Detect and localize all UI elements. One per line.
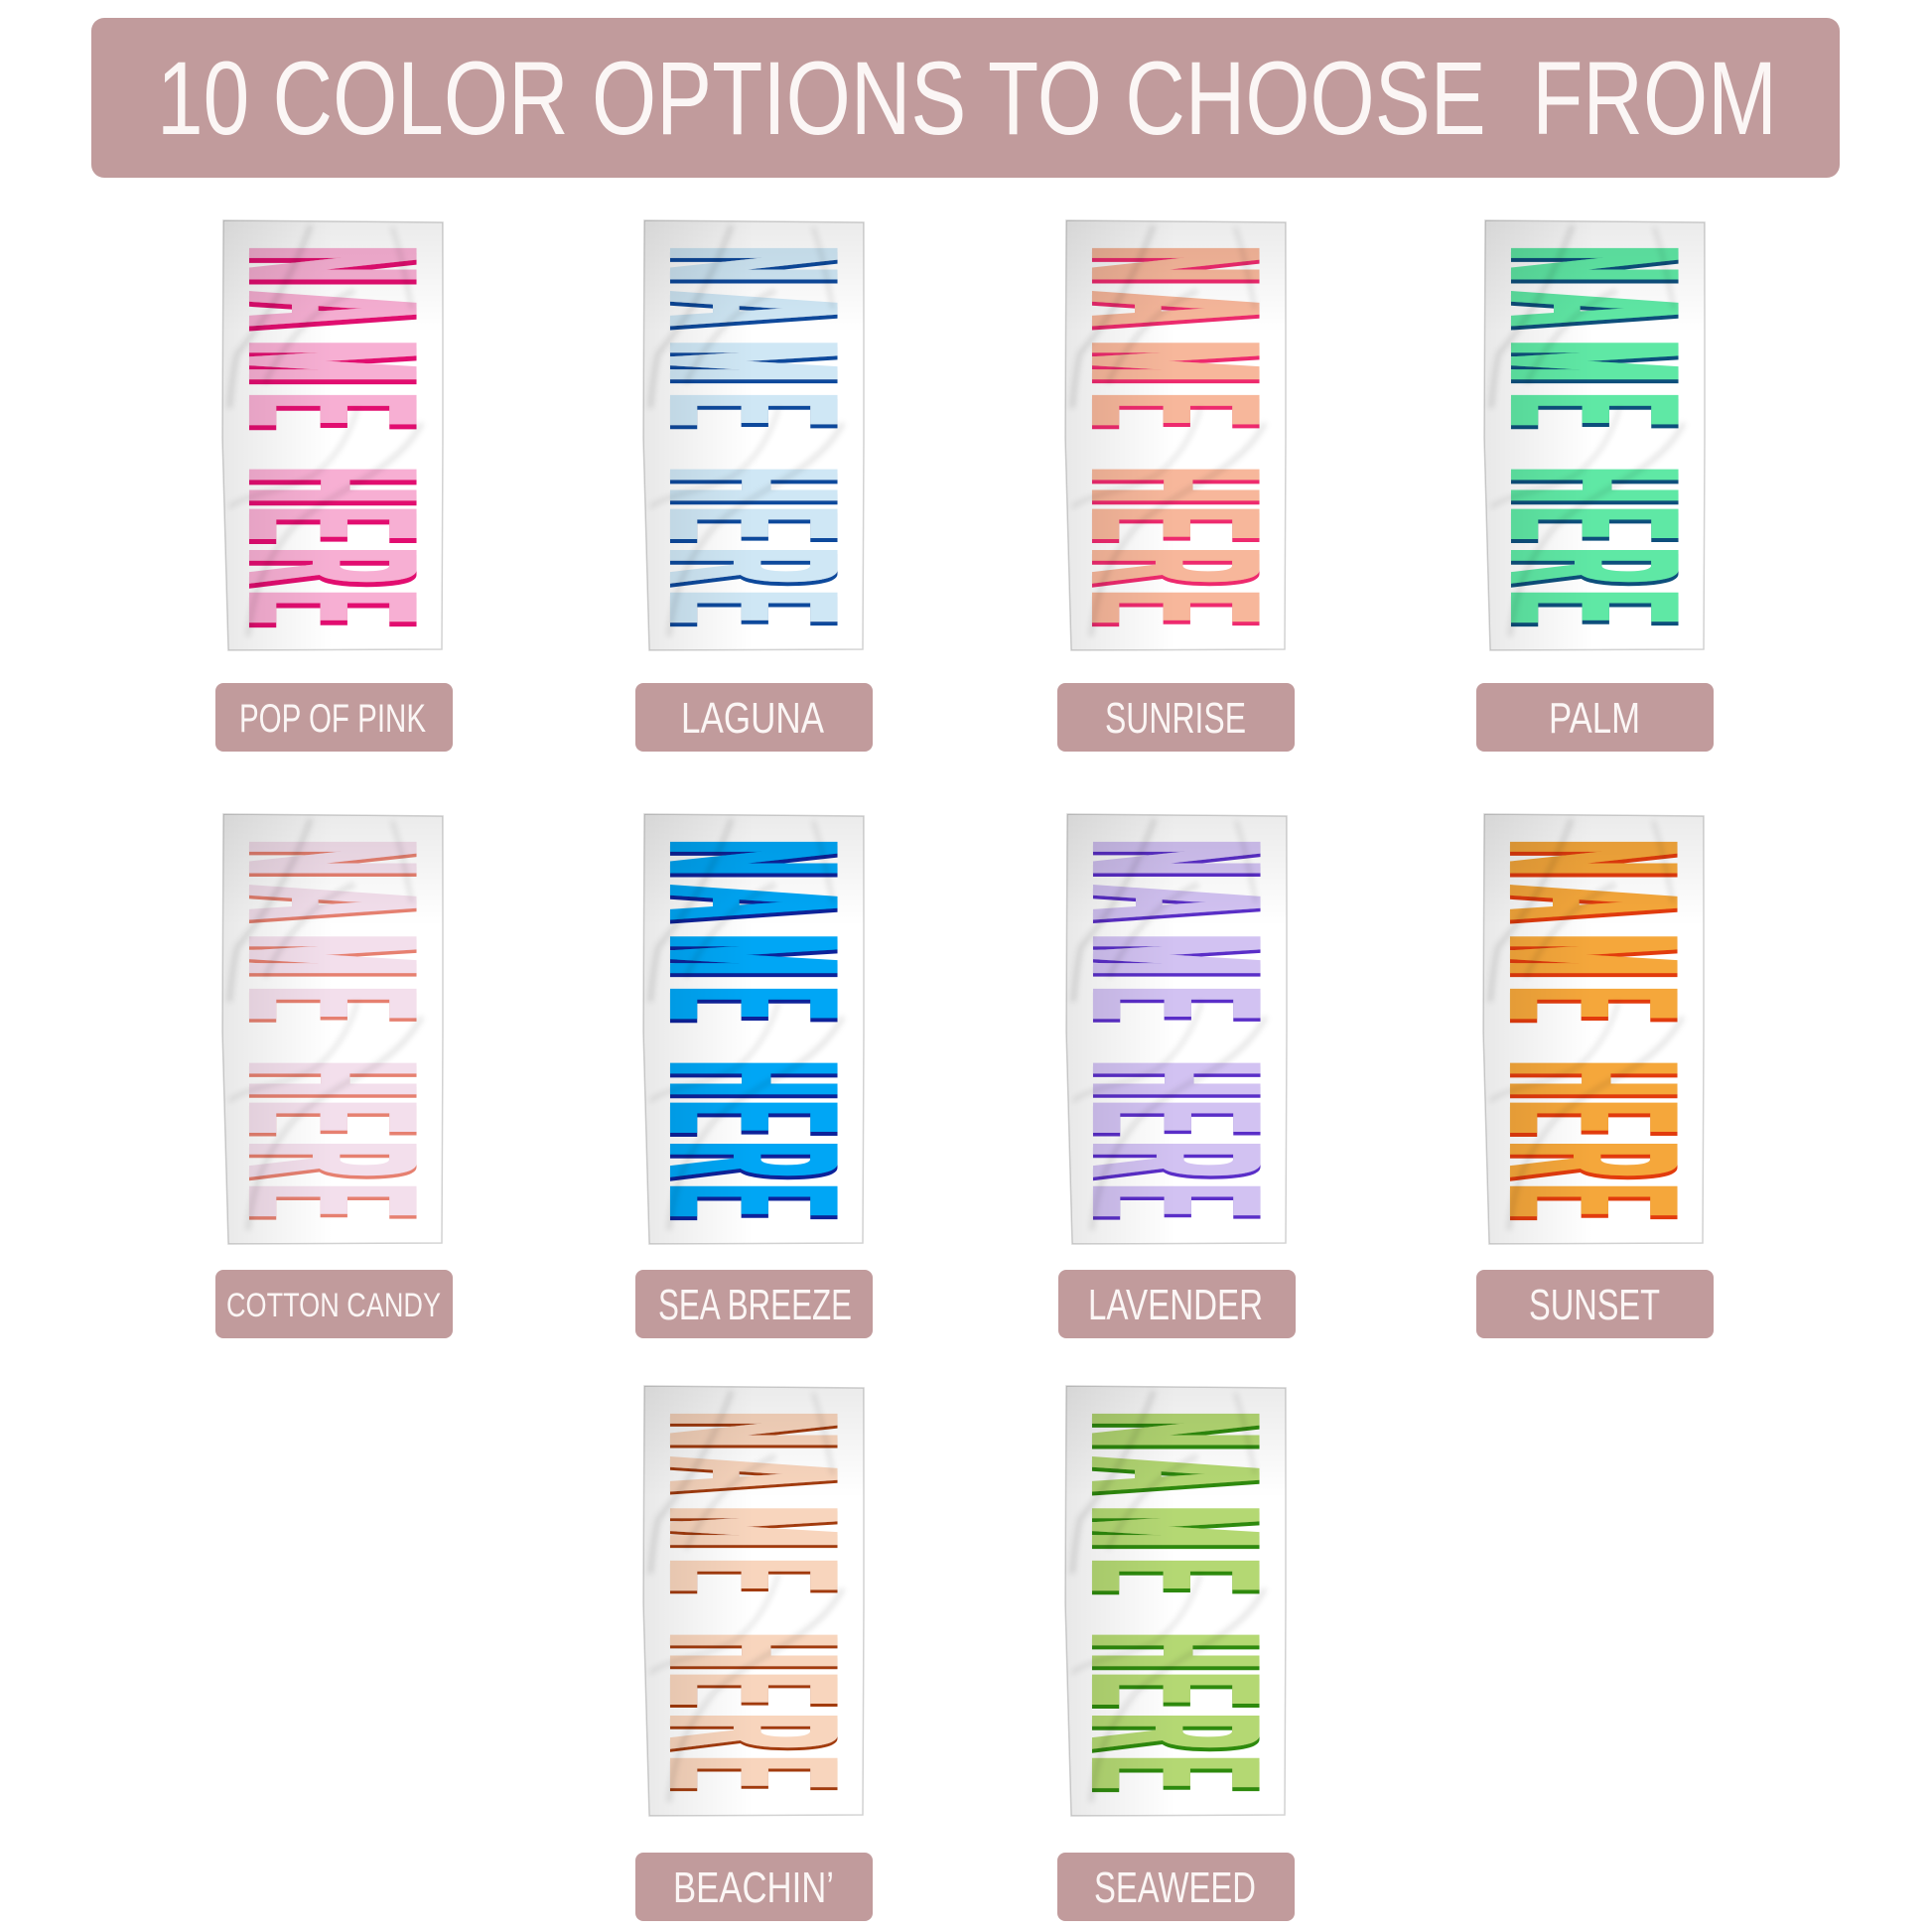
towel name text: NAME xyxy=(1458,247,1730,425)
towel name text: HERE xyxy=(618,469,890,622)
towel name text: NAME xyxy=(1457,841,1729,1019)
label: sunset: SUNSET xyxy=(1529,1281,1660,1329)
label: lavender: LAVENDER xyxy=(1088,1281,1263,1329)
towel name text xyxy=(1458,247,1730,622)
option: sunset xyxy=(1457,814,1729,1338)
label: cotton candy xyxy=(215,1270,453,1338)
label: sea breeze: SEA BREEZE xyxy=(658,1281,852,1329)
option: cotton candy xyxy=(197,814,469,1338)
option: palm xyxy=(1458,220,1730,752)
label: seaweed xyxy=(1057,1853,1295,1921)
towel name text: HERE xyxy=(1039,1634,1311,1788)
towel: lavender xyxy=(1040,814,1312,1244)
label: beachin: BEACHIN’ xyxy=(673,1863,834,1912)
towel name text: HERE xyxy=(1458,469,1730,622)
towel name text: NAME xyxy=(618,247,890,425)
label: sunset xyxy=(1476,1270,1714,1338)
towel: beachin xyxy=(618,1386,890,1816)
label: lavender xyxy=(1058,1270,1296,1338)
towel name text xyxy=(618,247,890,622)
label: sunrise xyxy=(1057,683,1295,752)
option: sea breeze xyxy=(618,814,890,1338)
title banner xyxy=(91,18,1840,178)
towel name text: NAME xyxy=(1039,1413,1311,1590)
label: seaweed: SEAWEED xyxy=(1094,1863,1256,1912)
towel name text xyxy=(197,841,469,1216)
towel: laguna xyxy=(618,220,890,650)
towel name text: HERE xyxy=(1040,1062,1312,1216)
option: laguna xyxy=(618,220,890,752)
towel name text: NAME xyxy=(197,841,469,1019)
towel name text: NAME xyxy=(618,1413,890,1590)
label: palm xyxy=(1476,683,1714,752)
towel name text: HERE xyxy=(1457,1062,1729,1216)
label: laguna: LAGUNA xyxy=(681,694,825,743)
towel: palm xyxy=(1458,220,1730,650)
towel name text: HERE xyxy=(618,1634,890,1788)
towel name text xyxy=(1039,247,1311,622)
towel: sea breeze xyxy=(618,814,890,1244)
towel name text: NAME xyxy=(618,841,890,1019)
label: sea breeze xyxy=(635,1270,873,1338)
towel: sunrise xyxy=(1039,220,1311,650)
towel name text xyxy=(618,841,890,1216)
towel name text: NAME xyxy=(1039,247,1311,425)
label: pop of pink xyxy=(215,683,453,752)
towel name text: HERE xyxy=(197,469,469,622)
towel name text: HERE xyxy=(1039,469,1311,622)
option: pop of pink xyxy=(197,220,469,752)
towel name text: HERE xyxy=(197,1062,469,1216)
towel name text xyxy=(1457,841,1729,1216)
label: palm: PALM xyxy=(1549,694,1640,743)
towel name text xyxy=(1040,841,1312,1216)
option: beachin xyxy=(618,1386,890,1921)
towel name text xyxy=(618,1413,890,1788)
towel: cotton candy xyxy=(197,814,469,1244)
label: beachin xyxy=(635,1853,873,1921)
towel name text xyxy=(1039,1413,1311,1788)
towel: pop of pink xyxy=(197,220,469,650)
towel name text: NAME xyxy=(197,247,469,425)
option: lavender xyxy=(1040,814,1312,1338)
label: pop of pink: POP OF PINK xyxy=(239,697,426,741)
option: sunrise xyxy=(1039,220,1311,752)
towel name text: NAME xyxy=(1040,841,1312,1019)
towel name text xyxy=(197,247,469,622)
towel: sunset xyxy=(1457,814,1729,1244)
label: sunrise: SUNRISE xyxy=(1105,694,1246,743)
label: cotton candy: COTTON CANDY xyxy=(226,1287,441,1324)
label: laguna xyxy=(635,683,873,752)
towel: seaweed xyxy=(1039,1386,1311,1816)
option: seaweed xyxy=(1039,1386,1311,1921)
towel name text: HERE xyxy=(618,1062,890,1216)
